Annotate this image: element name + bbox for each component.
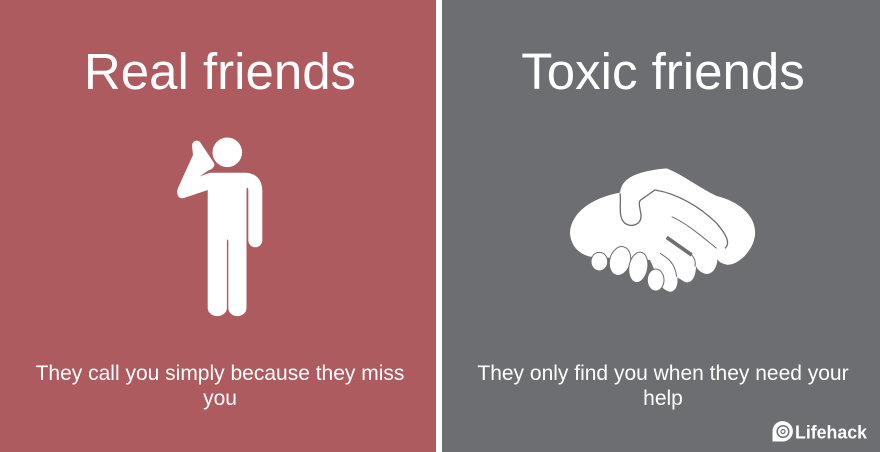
logo: lifehack (772, 421, 868, 442)
caption: real friends: you (203, 387, 237, 410)
panel: toxic friends (442, 0, 880, 452)
heading: toxic friends: Toxic friends (521, 43, 805, 100)
icon: person on phone (177, 138, 262, 316)
caption: toxic friends (477, 362, 849, 410)
caption: real friends: They call you simply because they miss (36, 362, 404, 385)
logo mark (772, 421, 793, 442)
caption: toxic friends: help (643, 387, 683, 410)
panel: real friends (0, 0, 436, 452)
caption: toxic friends: They only find you when they need your (477, 362, 849, 385)
icon: handshake (570, 168, 755, 292)
heading: real friends: Real friends (84, 43, 356, 100)
caption: real friends (36, 362, 404, 410)
logo wordmark: Lifehack (795, 422, 868, 442)
